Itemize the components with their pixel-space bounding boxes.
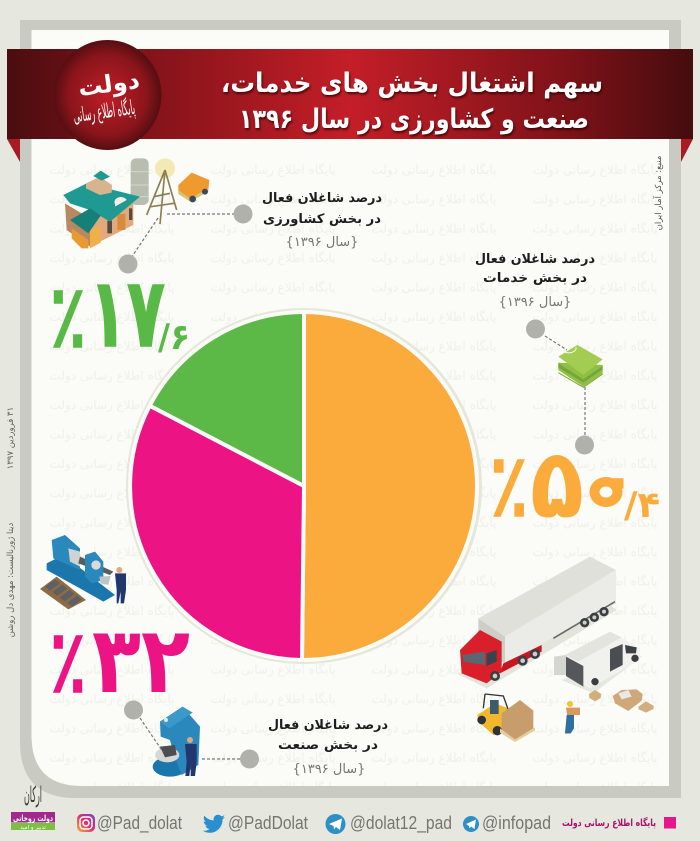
value: agriculture 17.6%: /۶ (158, 317, 190, 358)
watermark pattern (32, 156, 669, 786)
logo disc (54, 40, 162, 150)
social: twitter (203, 813, 308, 833)
banner title text (221, 68, 603, 135)
value: services 50.4%: ۰ (600, 445, 637, 515)
illustration: industrial lathe (40, 535, 126, 609)
social: telegram channel two: @infopad (482, 813, 551, 833)
icon: twitter bird (203, 815, 225, 833)
logo disc: دولت (76, 66, 141, 102)
date side note: ۳۱ فروردین ۱۳۹۷ (6, 407, 16, 469)
icon: telegram (463, 816, 479, 832)
connector dots: agriculture (118, 204, 252, 274)
label: services: درصد شاغلان فعال (475, 252, 595, 267)
footer site name: پایگاه اطلاع رسانی دولت (562, 816, 656, 829)
label: services: در بخش خدمات (483, 271, 587, 286)
illustration: banknote stack (558, 345, 603, 387)
source note: منبع: مرکز آمار ایران (652, 156, 664, 230)
label: services (475, 252, 595, 310)
social: telegram channel one: @dolat12_pad (350, 813, 452, 834)
slice: agriculture 17.6% (150, 312, 304, 486)
illustration: industrial press (153, 707, 200, 777)
zero ring (590, 477, 622, 507)
value: agriculture 17.6%: ٪ (50, 265, 86, 368)
pie chart (126, 308, 482, 664)
value: services 50.4%: /۴ (624, 485, 660, 526)
slice: services 50.4% (302, 312, 477, 660)
social: telegram channel one (326, 813, 452, 834)
footer logo: تدبیر و امید (20, 825, 46, 831)
connector dots: industry (124, 700, 259, 768)
illustration: farm (63, 158, 209, 248)
label: industry: درصد شاغلان فعال (268, 718, 388, 733)
social: instagram: @Pad_dolat (97, 813, 182, 834)
footer logo: ارکان (24, 783, 42, 808)
value: services 50.4% (490, 428, 660, 540)
value: services 50.4%: ٪ (490, 434, 528, 537)
icon: instagram (77, 814, 95, 832)
label: industry: {سال ۱۳۹۶} (293, 762, 365, 777)
footer logo: دولت روحانی (13, 814, 53, 824)
icon: telegram (326, 814, 346, 834)
social: twitter: @PadDolat (228, 813, 308, 833)
footer logo (11, 783, 55, 831)
label: services: {سال ۱۳۹۶} (499, 295, 571, 310)
logo disc: پایگاه اطلاع رسانی (72, 95, 137, 128)
social: instagram (77, 813, 182, 834)
banner title text: سهم اشتغال بخش های خدمات، (221, 68, 603, 99)
value: industry 32% (50, 607, 190, 714)
slice: industry 32% (130, 406, 304, 660)
illustration: trucks and logistics (457, 557, 654, 742)
label: agriculture: {سال ۱۳۹۶} (286, 235, 358, 250)
label: agriculture: در بخش کشاورزی (263, 212, 381, 227)
banner title text: صنعت و کشاورزی در سال ۱۳۹۶ (239, 104, 589, 135)
title banner (7, 49, 693, 162)
value: services 50.4%: ۵ (530, 428, 584, 540)
label: industry (268, 718, 388, 777)
value: industry 32%: ۳۲ (92, 607, 190, 714)
label: agriculture: درصد شاغلان فعال (262, 191, 382, 206)
label: industry: در بخش صنعت (278, 738, 378, 753)
value: agriculture 17.6%: ۱۷ (89, 257, 165, 369)
value: industry 32%: ٪ (50, 610, 86, 713)
label: agriculture (262, 191, 382, 250)
connector dots: services (526, 320, 594, 454)
author side note: دیتا ژورنالیست: مهدی دل روشن (6, 522, 16, 637)
value: agriculture 17.6% (50, 257, 190, 369)
